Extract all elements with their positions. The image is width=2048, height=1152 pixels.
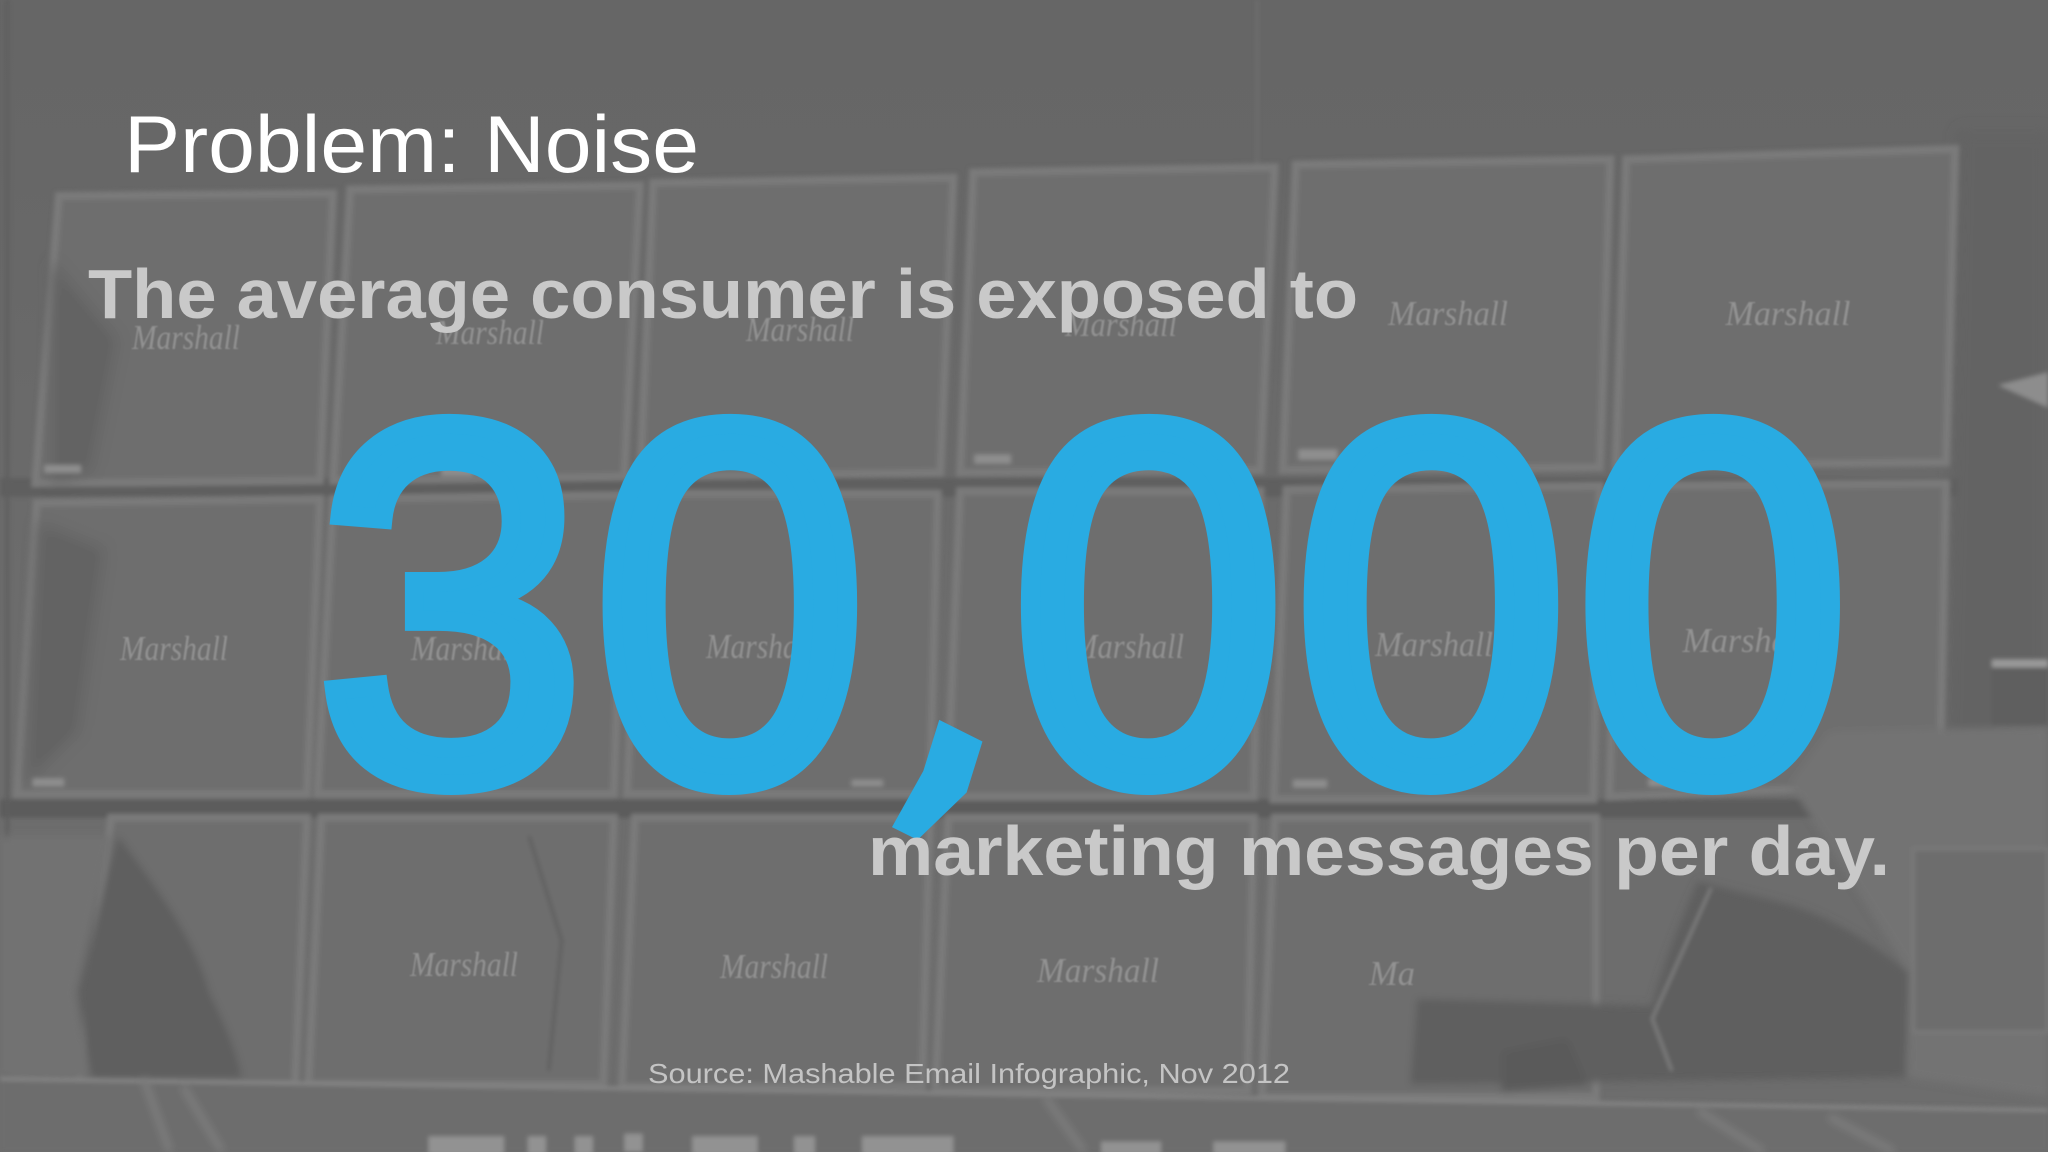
darker gutters behind cabinets	[0, 799, 1829, 818]
Marshall logos on cabinets: Marshall	[719, 947, 828, 986]
left stage monitor wedge	[0, 836, 111, 1078]
right stage monitors and gear	[1411, 882, 1910, 1084]
row 2	[17, 499, 320, 794]
big number: 30,000: 3	[316, 320, 585, 889]
Marshall logos on cabinets: Marshall	[1725, 294, 1850, 333]
row 3	[78, 818, 307, 1084]
Marshall logos on cabinets: Marshall	[705, 627, 814, 666]
banner lettering	[428, 1134, 1285, 1152]
Marshall logos on cabinets: Marshall	[1682, 621, 1808, 660]
source citation: Source: Mashable Email Infographic, Nov 2012	[648, 1058, 1290, 1089]
Marshall logos on cabinets: Marshall	[1036, 951, 1159, 990]
big number: 30,000	[316, 319, 1850, 900]
cabinet badge highlights	[33, 449, 1680, 788]
left edge haze	[52, 261, 118, 483]
title: Problem: Noise	[124, 100, 699, 190]
Marshall logos on cabinets: Marshall	[409, 945, 518, 984]
Marshall logos on cabinets: Marshall	[1071, 627, 1184, 666]
row 1	[17, 149, 1955, 1097]
Marshall logos on cabinets: Marshall	[1374, 625, 1493, 664]
mic stand	[529, 836, 562, 1071]
stage front banner	[0, 1079, 2048, 1152]
big number: 30,000: 000	[1011, 319, 1850, 889]
Marshall logos on cabinets: Marshall	[1064, 305, 1177, 344]
Marshall logos on cabinets: Marshall	[745, 310, 854, 349]
Marshall logos on cabinets: Marshall	[1387, 294, 1508, 333]
Marshall logos on cabinets: Marshall	[119, 629, 228, 668]
lead-in sentence: The average consumer is exposed to	[88, 255, 1358, 333]
big number: 30,000: ,	[869, 456, 1086, 900]
Marshall logos on cabinets: Marshall	[410, 629, 519, 668]
big number: 30,000: 0	[593, 319, 867, 889]
closing sentence: marketing messages per day.	[868, 812, 1890, 890]
Marshall logos on cabinets: Marshall	[435, 313, 544, 352]
Marshall logos on cabinets: Marshall	[131, 318, 240, 357]
Marshall logos on cabinets: Ma	[1368, 954, 1415, 993]
Marshall logos on cabinets	[119, 294, 1851, 993]
